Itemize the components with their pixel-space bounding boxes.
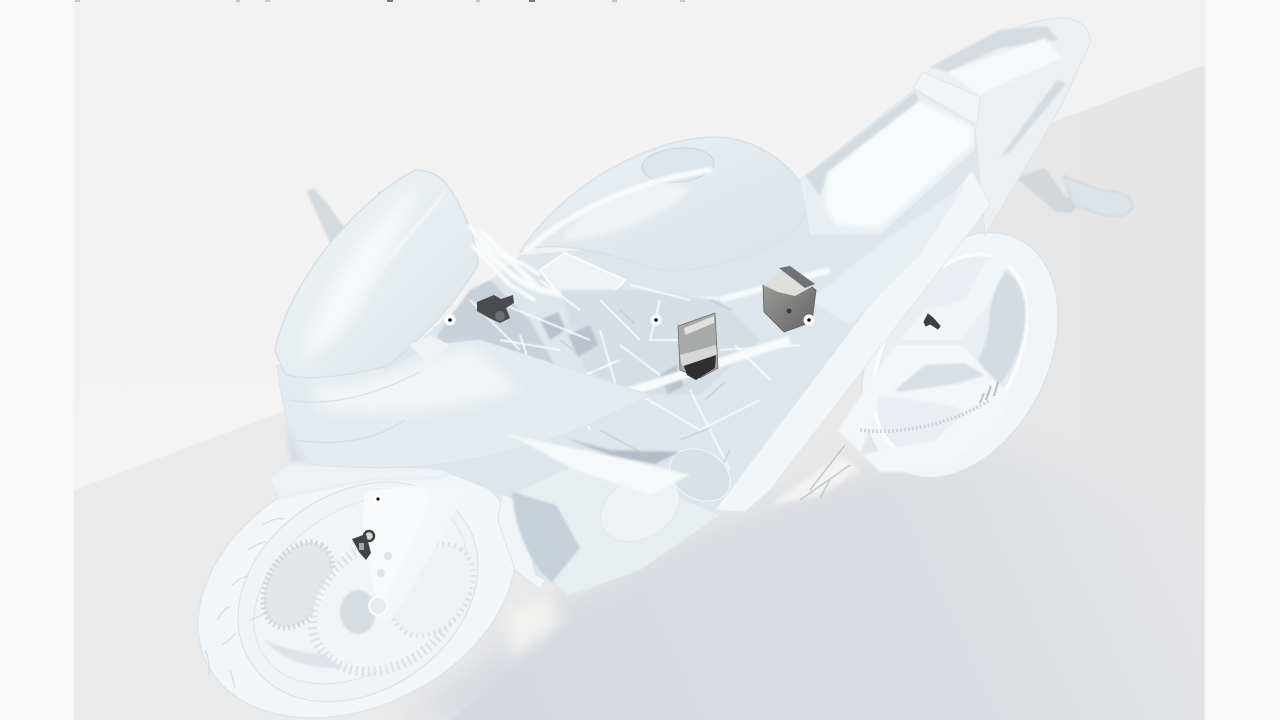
- seat and tail unit: [800, 18, 1090, 235]
- chin shade: [285, 420, 312, 465]
- fork leg: [375, 478, 470, 622]
- ESC control unit (ABS modulator): [763, 266, 816, 332]
- fork lower: [362, 485, 432, 612]
- modulator body: [763, 275, 816, 332]
- rear rim recess: [842, 229, 1058, 481]
- belly pan dark recess: [512, 492, 580, 582]
- ECU light rib: [684, 316, 714, 335]
- rear wheel speed sensor: [924, 314, 940, 329]
- engine cover round: [589, 461, 691, 555]
- tail shell: [925, 18, 1090, 235]
- modulator top: [763, 267, 815, 296]
- tread grooves: [205, 519, 284, 688]
- nose grille: [410, 335, 450, 365]
- sensor tip: [359, 543, 364, 550]
- seat cushion light: [825, 100, 973, 228]
- callout marker: sensor: [444, 314, 456, 326]
- clipped top caption remnants: descenders of cropped text: [75, 0, 685, 2]
- upper shock mount: [900, 240, 1015, 340]
- main brake disc: [287, 511, 483, 699]
- left brake disc: [249, 530, 347, 640]
- head-on triple clamp lines: [468, 225, 540, 300]
- windscreen highlight: [300, 185, 420, 360]
- lower nose fairing: [277, 340, 650, 468]
- grey cavity behind nose: [437, 280, 560, 395]
- front rim recess: [254, 496, 466, 684]
- airbox internals: [560, 290, 760, 395]
- front tyre: [198, 458, 516, 718]
- chain: [860, 400, 990, 431]
- seat side shade: [806, 92, 920, 197]
- axle cap: [369, 597, 387, 615]
- tank shell: [520, 137, 812, 271]
- ECU connector: [684, 355, 716, 380]
- engine lines: [450, 280, 800, 470]
- belly white sweep: [500, 433, 690, 495]
- fuel tank: [520, 137, 812, 271]
- front fairing: [275, 170, 650, 468]
- lower fork right leg and fairing gap: [498, 470, 565, 590]
- sensor arm: [352, 534, 371, 560]
- sensor body: [477, 295, 514, 323]
- engine and internals region: [430, 253, 800, 540]
- swingarm window: [895, 363, 985, 392]
- rear disc arc: [972, 268, 1026, 395]
- upper frame tubes: [470, 170, 830, 300]
- ground shadow and reflected light: [424, 458, 1108, 720]
- tail seat cowl grey: [930, 26, 1058, 72]
- front wheel speed sensor: [352, 531, 374, 560]
- frame rail side: [810, 185, 965, 325]
- dark gaps: [540, 312, 684, 394]
- right edge strip of the image: [1204, 0, 1206, 720]
- ECU body: [678, 313, 718, 378]
- main frame rail diagonal: [715, 170, 990, 512]
- sensor connector: [495, 311, 505, 321]
- hub: [340, 590, 376, 634]
- windscreen crease: [355, 192, 445, 305]
- front fender: [270, 450, 480, 498]
- inner rim crescent: [265, 620, 450, 668]
- swingarm: [838, 345, 1012, 472]
- engine dark slit: [565, 438, 680, 464]
- engine control unit: [678, 313, 718, 380]
- footpeg linkage: [800, 445, 850, 500]
- mirror left: [306, 188, 345, 250]
- engine block: [440, 355, 720, 540]
- belly pan outer: [520, 465, 720, 596]
- disc hole ring inner: [374, 528, 490, 652]
- callout marker: control unit: [804, 314, 814, 326]
- battery box: [540, 253, 625, 310]
- ECU band: [680, 345, 717, 366]
- tank highlight: [560, 184, 690, 240]
- sprocket logo marks: [980, 382, 998, 403]
- tail side vent: [1000, 80, 1066, 157]
- taillight and number plate bracket: [1016, 168, 1133, 217]
- modulator hole: [786, 308, 792, 314]
- tail wedge: [913, 72, 980, 125]
- callout marker: ECU: [650, 314, 662, 326]
- sensor head: [364, 531, 374, 541]
- exhaust shadow: [660, 438, 740, 512]
- mirror right stub: [377, 191, 387, 202]
- callout marker: front wheel sensor: [374, 494, 382, 504]
- lower fairing belly pan: [500, 433, 740, 596]
- rear sensor body: [924, 314, 940, 329]
- front wheel: [198, 458, 516, 718]
- body envelope: [282, 120, 978, 597]
- front rim outer: [238, 482, 478, 702]
- seat: [800, 90, 975, 235]
- bolts: [377, 552, 392, 577]
- lower white tube sweep: [430, 340, 790, 422]
- inertial sensor: [477, 295, 514, 323]
- rear wheel: [823, 199, 1097, 511]
- nose crease: [290, 372, 420, 402]
- tail top highlight: [948, 38, 1062, 95]
- modulator dark top rib: [779, 266, 815, 288]
- windscreen: [275, 170, 478, 378]
- tank cap recess: [641, 145, 715, 185]
- rear tyre: [823, 199, 1097, 511]
- fairing lower edge: [295, 420, 405, 442]
- lower nose light area: [310, 345, 520, 414]
